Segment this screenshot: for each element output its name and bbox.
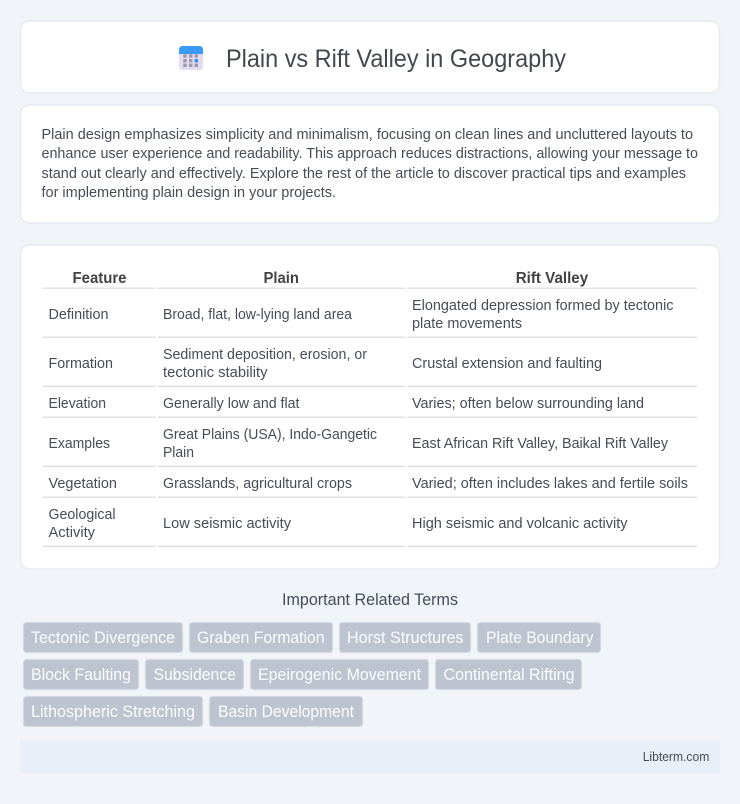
row: definition: Definition — [48, 307, 108, 323]
tag: continental rifting: Continental Rifting — [444, 665, 574, 684]
row: examples: Plain — [163, 445, 194, 461]
tag: continental rifting — [436, 660, 582, 690]
row: examples: Examples — [48, 436, 110, 452]
intro paragraph — [42, 127, 698, 201]
table header row — [43, 270, 697, 289]
row: vegetation: Varied; often includes lakes and fertile soils — [412, 476, 688, 492]
table header row: Plain — [264, 270, 299, 287]
row: formation: Formation — [48, 356, 113, 372]
row: elevation: Elevation — [48, 396, 106, 412]
row: geological activity: Geological — [48, 507, 116, 523]
footer bar — [20, 740, 720, 774]
panel: intro text — [20, 105, 720, 223]
tag: block faulting: Block Faulting — [31, 665, 131, 684]
tag: plate boundary: Plate Boundary — [486, 628, 594, 647]
intro paragraph: Plain design emphasizes simplicity and minimalism, focusing on clean lines and uncluttered layouts to — [42, 127, 693, 143]
row: definition: Broad, flat, low-lying land area — [163, 307, 353, 323]
row: formation — [43, 347, 697, 387]
row: elevation — [43, 396, 697, 418]
tag group: related terms — [24, 622, 600, 726]
table header row: Feature — [72, 270, 127, 287]
row: geological activity: Activity — [48, 525, 96, 541]
panel: comparison table — [20, 245, 720, 569]
row: definition — [43, 298, 697, 338]
row: geological activity: Low seismic activity — [163, 516, 292, 532]
tag: graben formation: Graben Formation — [197, 628, 324, 647]
row: formation: Sediment deposition, erosion, or — [163, 347, 367, 363]
row: examples: East African Rift Valley, Baikal Rift Valley — [412, 436, 669, 452]
tag: horst structures — [340, 622, 470, 652]
panel: header — [20, 21, 720, 93]
tag: basin development: Basin Development — [218, 702, 354, 721]
tag: subsidence: Subsidence — [154, 665, 236, 684]
tag: lithospheric stretching: Lithospheric Stretching — [31, 702, 195, 721]
row: formation: Crustal extension and faulting — [412, 356, 602, 372]
footer credit: Libterm.com — [643, 750, 709, 764]
row: formation: tectonic stability — [163, 365, 268, 381]
tag: subsidence — [146, 660, 244, 690]
row: elevation: Varies; often below surrounding land — [412, 396, 644, 412]
tag: basin development — [210, 696, 362, 726]
tag: lithospheric stretching — [24, 696, 202, 726]
tag: tectonic divergence — [24, 622, 182, 652]
tag: horst structures: Horst Structures — [347, 628, 464, 647]
tag: block faulting — [24, 660, 138, 690]
tag: epeirogenic movement — [250, 660, 428, 690]
title: Plain vs Rift Valley in Geography — [226, 45, 566, 73]
intro paragraph: enhance user experience and readability. This approach reduces distractions, allowing your message to — [42, 146, 698, 162]
tag: tectonic divergence: Tectonic Divergence — [31, 628, 175, 647]
row: geological activity — [43, 507, 697, 547]
row: elevation: Generally low and flat — [163, 396, 300, 412]
tag: plate boundary — [478, 622, 600, 652]
icon: calendar — [179, 46, 203, 70]
row: vegetation: Vegetation — [48, 476, 117, 492]
tag: epeirogenic movement: Epeirogenic Movement — [258, 665, 421, 684]
row: vegetation: Grasslands, agricultural crops — [163, 476, 352, 492]
tag: graben formation — [190, 622, 332, 652]
heading: important related terms: Important Related Terms — [282, 591, 458, 609]
row: examples — [43, 427, 697, 467]
row: geological activity: High seismic and volcanic activity — [412, 516, 628, 532]
intro paragraph: for implementing plain design in your projects. — [42, 185, 336, 201]
row: examples: Great Plains (USA), Indo-Gangetic — [163, 427, 377, 443]
row: definition: plate movements — [412, 316, 522, 332]
table header row: Rift Valley — [516, 270, 588, 287]
intro paragraph: stand out clearly and effectively. Explore the rest of the article to discover practical tips and examples — [42, 166, 686, 182]
row: vegetation — [43, 476, 697, 498]
row: definition: Elongated depression formed by tectonic — [412, 298, 674, 314]
